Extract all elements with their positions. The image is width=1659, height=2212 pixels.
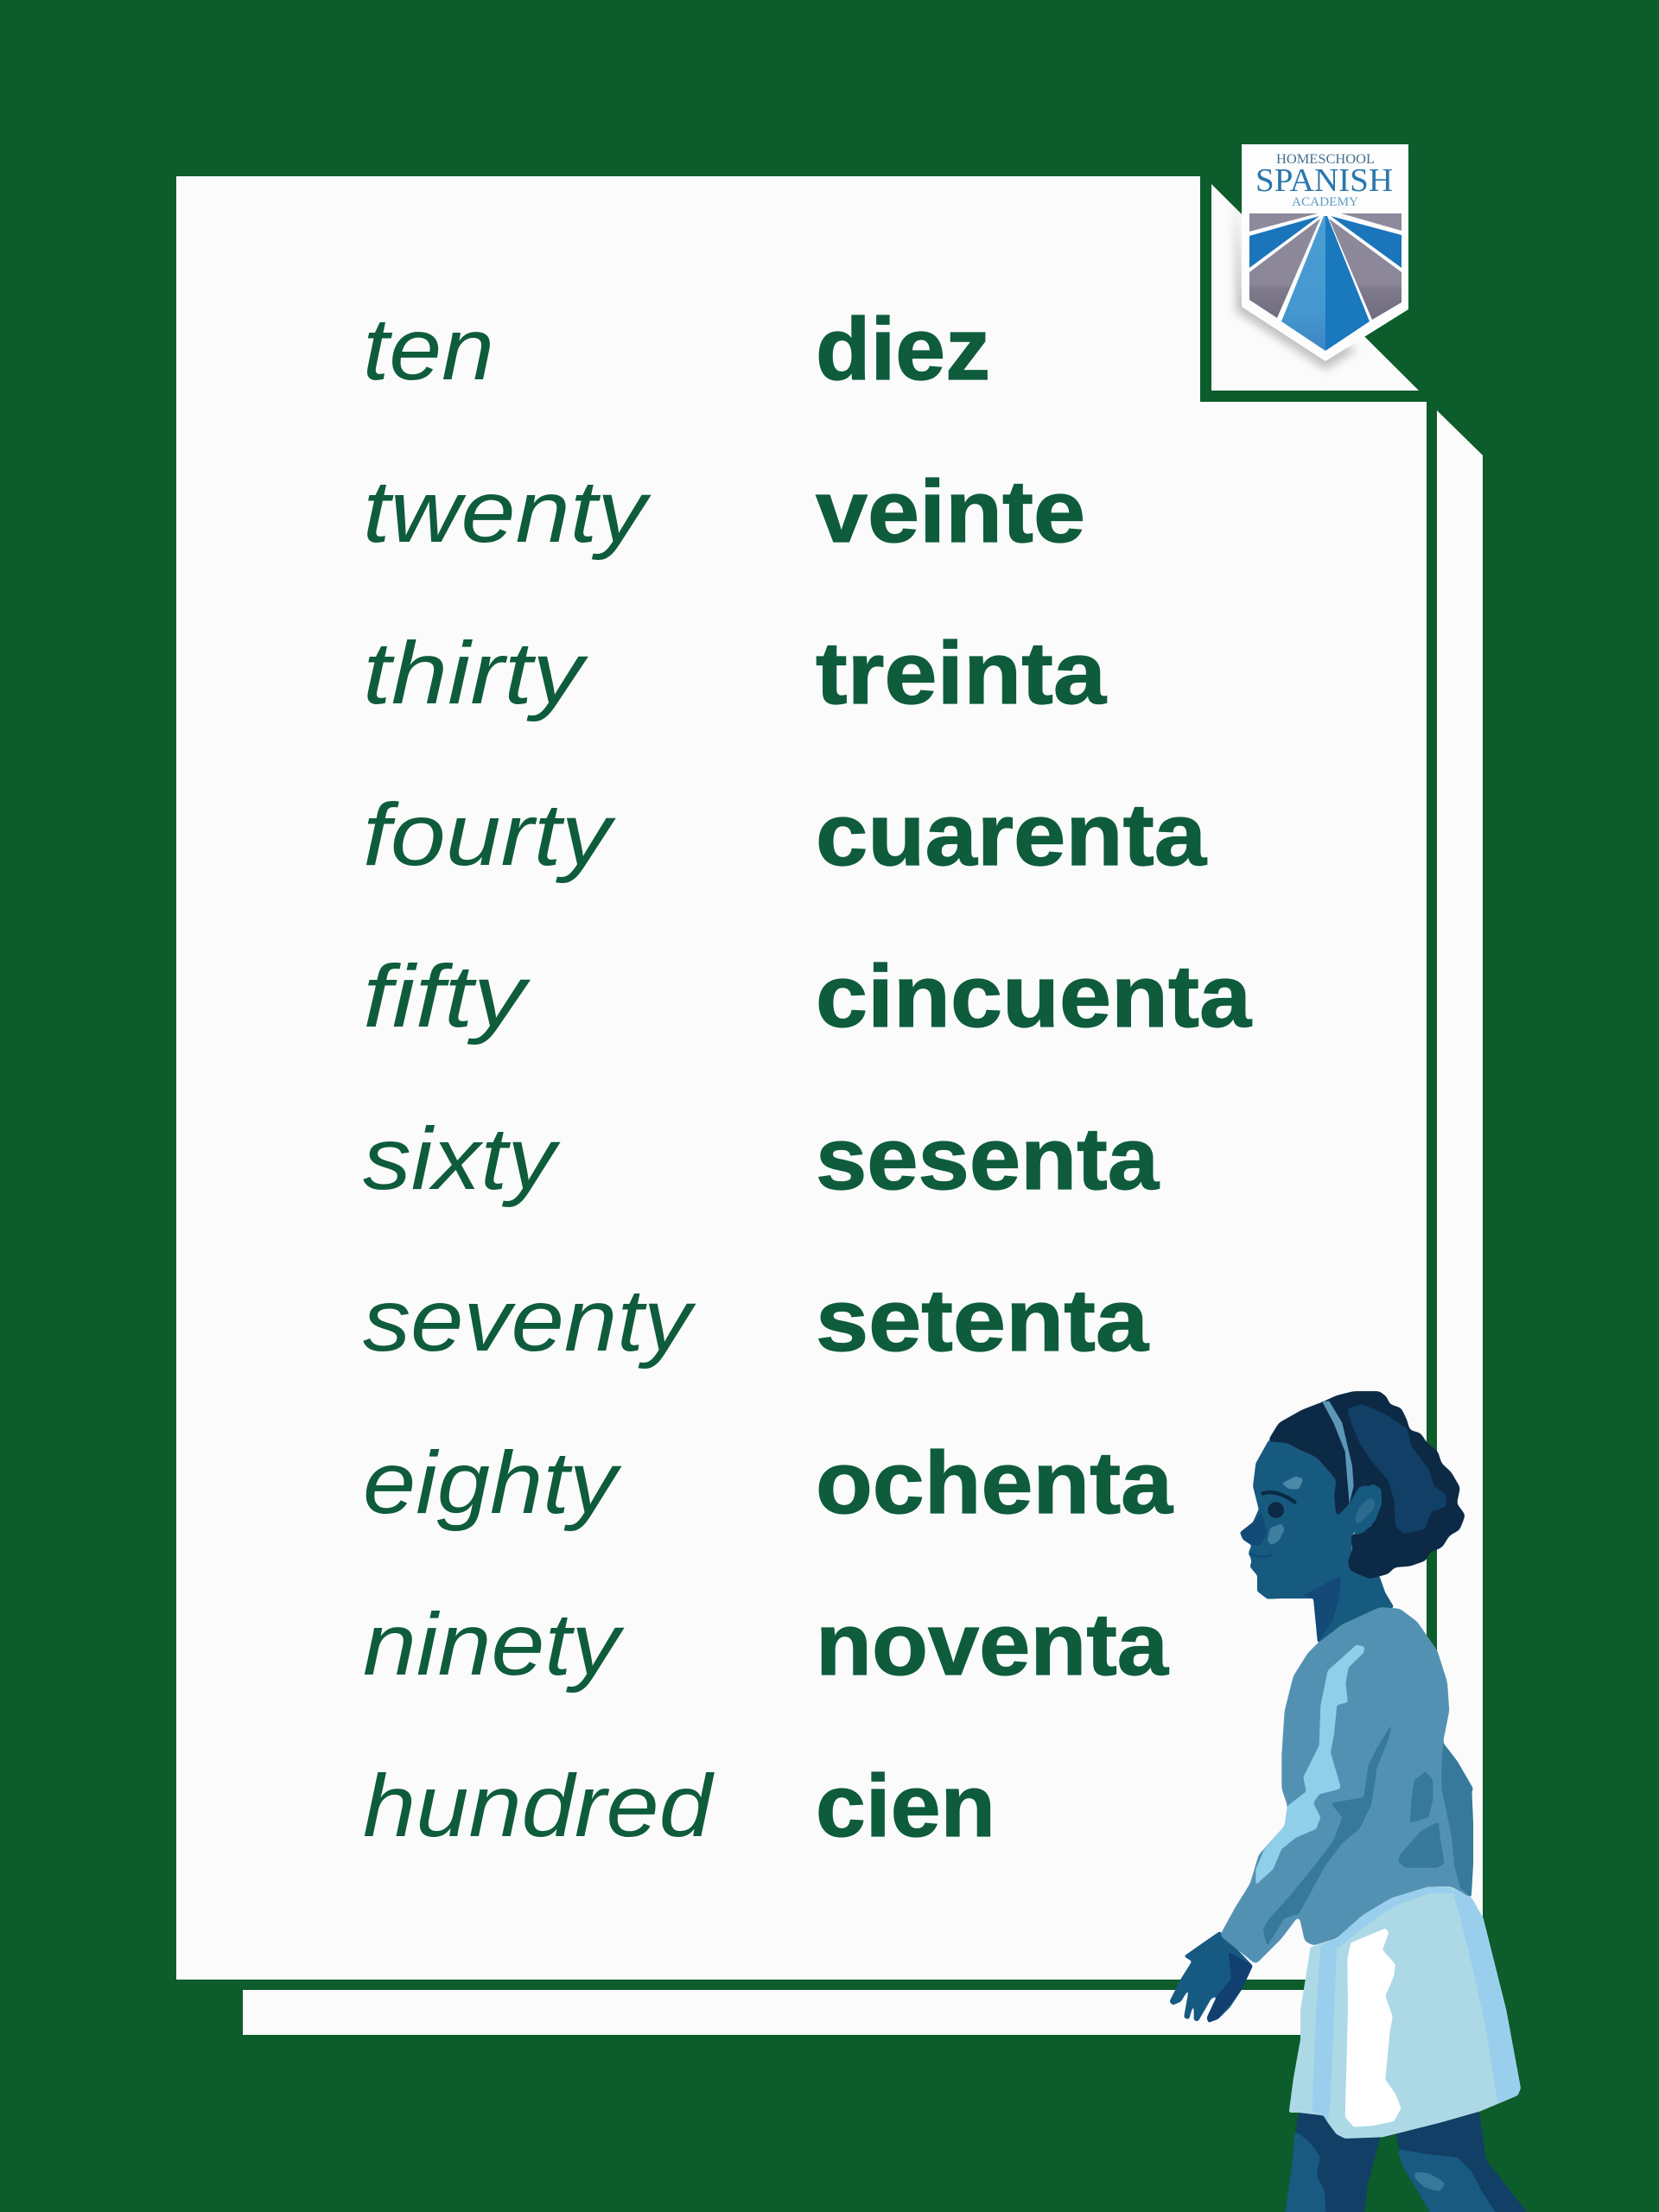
row: seventy: seventy <box>363 1271 696 1370</box>
row: seventy <box>363 1271 1149 1370</box>
panel: folded corner <box>1211 184 1419 391</box>
legs <box>1283 2110 1541 2212</box>
row: thirty: treinta <box>816 624 1107 722</box>
illustration: walking girl <box>1169 1391 1541 2212</box>
logo: Homeschool Spanish Academy shield <box>1236 144 1408 370</box>
row: ninety: ninety <box>363 1595 626 1694</box>
row: hundred: hundred <box>363 1757 715 1855</box>
row: eighty: ochenta <box>816 1433 1173 1532</box>
row: seventy: setenta <box>816 1271 1149 1370</box>
row: ten <box>363 300 990 398</box>
hand <box>1169 1931 1253 2023</box>
logo: Homeschool Spanish Academy shield: ACADEMY <box>1292 195 1358 209</box>
jacket <box>1220 1607 1473 1964</box>
row: hundred <box>363 1757 995 1855</box>
vocabulary table <box>363 300 1252 1855</box>
row: fourty: fourty <box>363 785 617 884</box>
row: ninety: noventa <box>816 1595 1169 1694</box>
row: ten: ten <box>363 300 494 398</box>
row: hundred: cien <box>816 1757 995 1855</box>
panel: main sheet <box>176 176 1427 1980</box>
row: fifty: cincuenta <box>816 947 1252 1046</box>
row: thirty <box>363 624 1107 722</box>
row: sixty <box>363 1109 1160 1208</box>
skirt <box>1289 1886 1521 2139</box>
row: eighty: eighty <box>363 1433 622 1532</box>
hair <box>1268 1391 1465 1579</box>
row: eighty <box>363 1433 1173 1532</box>
row: fourty: cuarenta <box>816 785 1207 884</box>
row: twenty: twenty <box>363 462 652 561</box>
logo: Homeschool Spanish Academy shield: HOMESCHOOL <box>1276 152 1375 167</box>
ear <box>1351 1484 1382 1535</box>
panel: back sheet <box>243 410 1483 2035</box>
neck and face <box>1240 1440 1394 1643</box>
row: ten: diez <box>816 300 990 398</box>
row: thirty: thirty <box>363 624 589 722</box>
row: sixty: sesenta <box>816 1109 1160 1208</box>
row: ninety <box>363 1595 1169 1694</box>
row: sixty: sixty <box>363 1109 562 1208</box>
logo: Homeschool Spanish Academy shield: SPANISH <box>1255 162 1393 199</box>
row: twenty <box>363 462 1085 561</box>
row: fifty: fifty <box>363 947 531 1046</box>
row: fourty <box>363 785 1207 884</box>
row: fifty <box>363 947 1252 1046</box>
row: twenty: veinte <box>816 462 1085 561</box>
